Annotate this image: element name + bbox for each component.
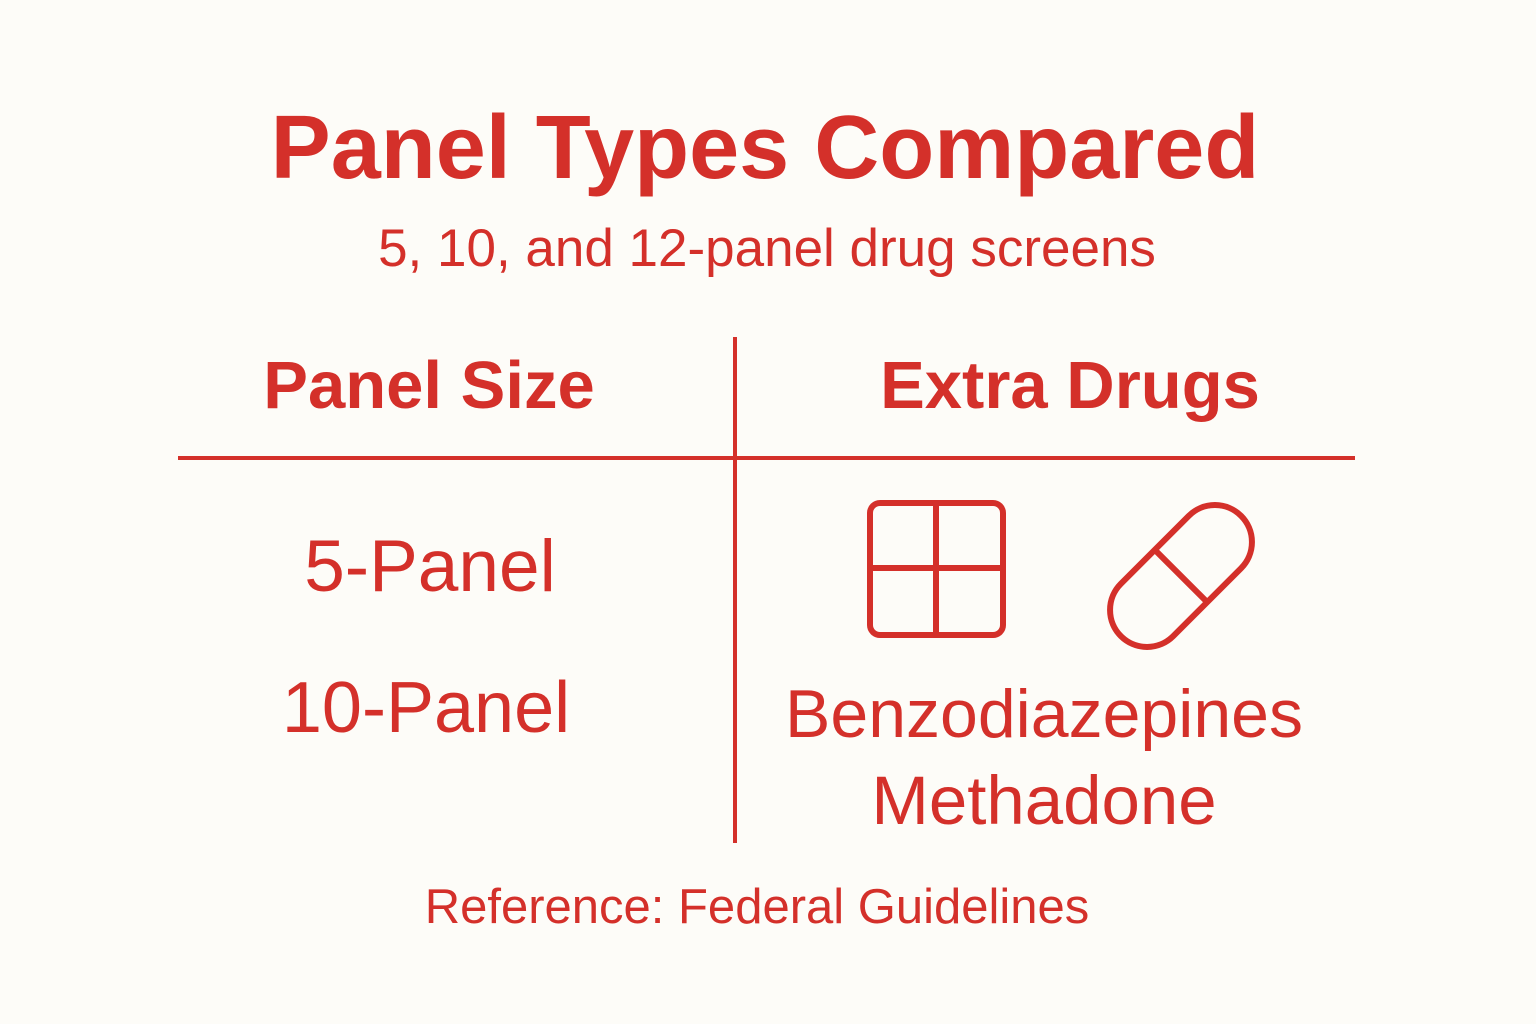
drug: benzodiazepines: Benzodiazepines	[785, 676, 1303, 752]
row label: 5-panel: 5-Panel	[304, 526, 556, 607]
subtitle: 5, 10, and 12-panel drug screens	[378, 219, 1156, 278]
title: Panel Types Compared	[271, 98, 1259, 198]
footer reference: Reference: Federal Guidelines	[425, 880, 1089, 934]
row label: 10-panel: 10-Panel	[282, 668, 570, 748]
header: extra drugs: Extra Drugs	[880, 348, 1260, 423]
icon: grid	[867, 500, 1006, 638]
icon: capsule	[1107, 502, 1255, 650]
header: panel size: Panel Size	[263, 348, 595, 423]
drug: methadone: Methadone	[871, 762, 1217, 839]
